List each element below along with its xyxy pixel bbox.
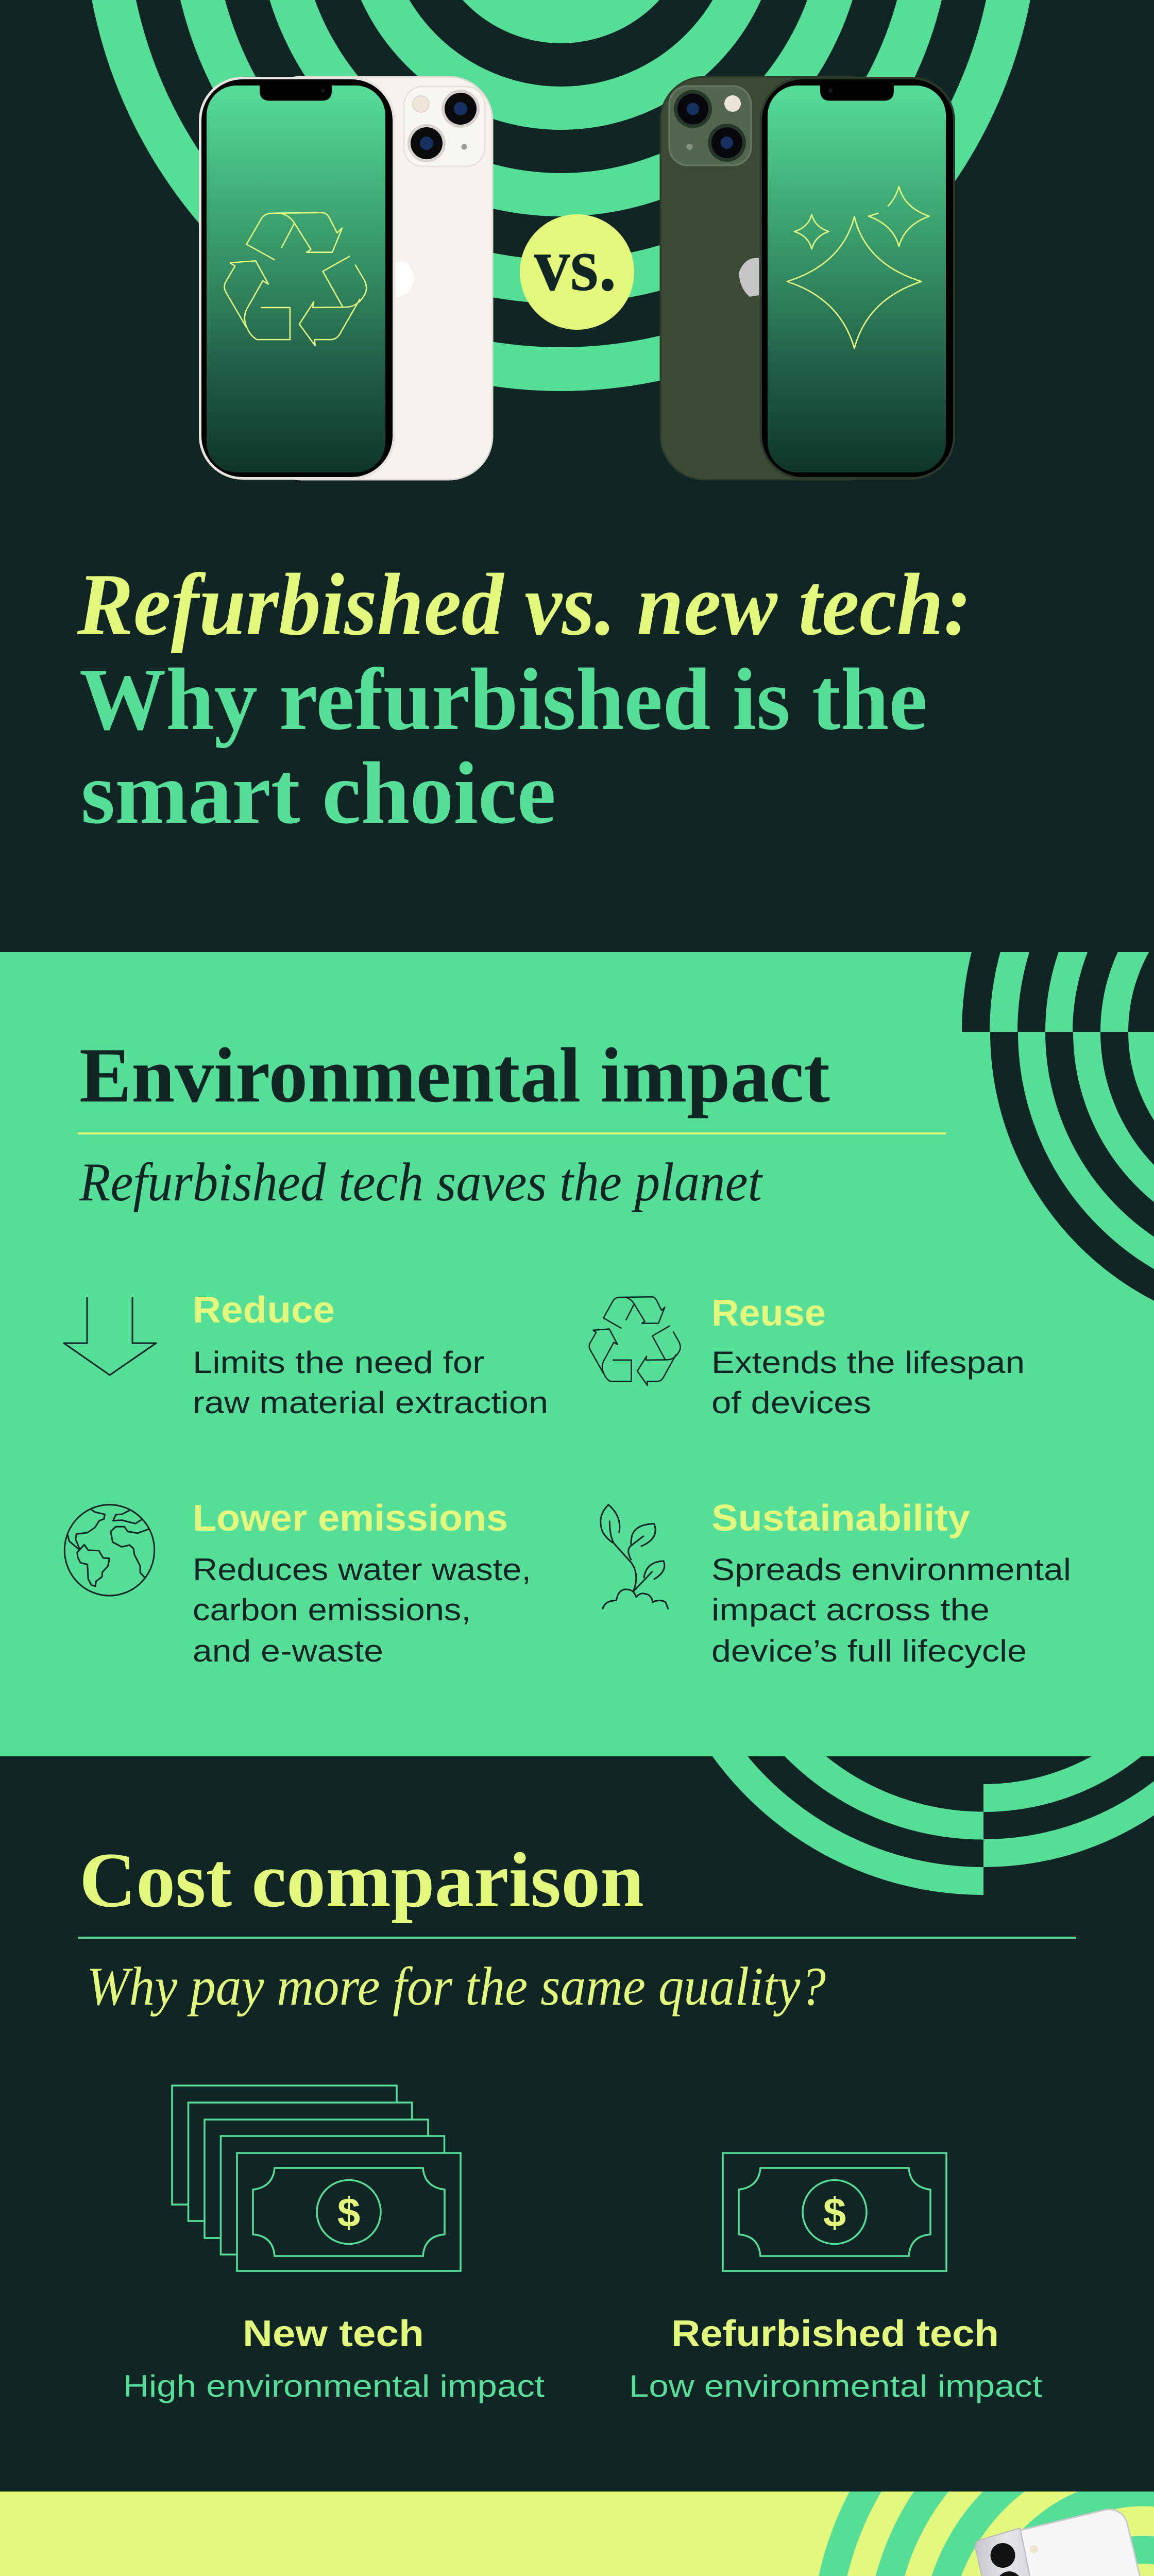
icon: plant — [601, 1505, 668, 1609]
label: refurbished tech — [629, 2313, 1042, 2403]
panel: cost comparison — [78, 1756, 1154, 2403]
text block: reduce: Limits the need for — [193, 1345, 484, 1380]
decorative arcs: quality panel — [819, 2492, 1154, 2576]
icon: recycle — [589, 1297, 681, 1385]
text block: sustainability: device’s full lifecycle — [711, 1634, 1027, 1668]
subheading: why pay more: Why pay more for the same quality? — [87, 1956, 826, 2016]
text block: reuse: Extends the lifespan — [711, 1345, 1025, 1380]
text block: lower emissions: Lower emissions — [193, 1498, 508, 1539]
label: refurbished tech: Refurbished tech — [671, 2313, 999, 2354]
text block: reduce: Reduce — [193, 1290, 335, 1331]
text block: lower emissions: Reduces water waste, — [193, 1552, 531, 1587]
title: Why refurbished is the — [79, 651, 927, 749]
text block: reuse — [711, 1293, 1025, 1420]
panel: quality assurance — [0, 2492, 1154, 2576]
text block: reduce: raw material extraction — [193, 1385, 548, 1420]
icon: white phone camera bump — [404, 87, 485, 166]
hero concentric rings — [83, 0, 1039, 391]
phone: green iPhone with sparkle screen — [660, 77, 955, 480]
label: new tech — [123, 2313, 545, 2403]
icon: globe — [64, 1505, 155, 1596]
icon: stack of bills: $ — [337, 2190, 360, 2235]
icon: Samsung camera island — [975, 2528, 1038, 2576]
label: new tech: New tech — [243, 2313, 424, 2354]
badge: vs. — [520, 214, 634, 330]
title — [77, 556, 972, 842]
text block: lower emissions: carbon emissions, — [193, 1592, 471, 1627]
phone: Samsung back — [975, 2505, 1154, 2576]
heading: cost comparison: Cost comparison — [79, 1837, 644, 1923]
icon: recycle symbol on screen — [225, 213, 366, 346]
decorative arcs: cost panel — [712, 1756, 1154, 1895]
panel: environmental impact — [0, 952, 1154, 1756]
text block: reuse: of devices — [711, 1385, 871, 1420]
decorative arcs: environmental panel — [962, 952, 1154, 1301]
text block: reduce — [193, 1290, 548, 1420]
text block: lower emissions: and e-waste — [193, 1634, 383, 1668]
text block: sustainability — [711, 1498, 1071, 1668]
text block: lower emissions — [193, 1498, 531, 1668]
text block: sustainability: impact across the — [711, 1592, 990, 1627]
title: smart choice — [81, 744, 556, 842]
label: refurbished tech: Low environmental impact — [629, 2369, 1042, 2403]
heading: environmental impact: Environmental impact — [79, 1032, 830, 1118]
title: Refurbished vs. new tech: — [77, 556, 972, 654]
subheading: refurbished tech saves the planet: Refurbished tech saves the planet — [79, 1152, 763, 1212]
icon: down arrow — [64, 1297, 156, 1375]
icon: stack of bills — [172, 2086, 461, 2271]
text block: sustainability: Sustainability — [711, 1498, 970, 1539]
text block: sustainability: Spreads environmental — [711, 1552, 1071, 1587]
phone: white iPhone with recycle screen — [199, 77, 493, 480]
text block: reuse: Reuse — [711, 1293, 826, 1334]
badge: vs.: vs. — [534, 222, 617, 307]
icon: green phone camera bump — [669, 86, 751, 165]
panel: hero background — [0, 0, 1154, 952]
label: new tech: High environmental impact — [123, 2369, 545, 2403]
icon: sparkles on screen — [787, 187, 929, 348]
icon: single bill: $ — [823, 2190, 846, 2235]
icon: single bill — [723, 2153, 946, 2271]
